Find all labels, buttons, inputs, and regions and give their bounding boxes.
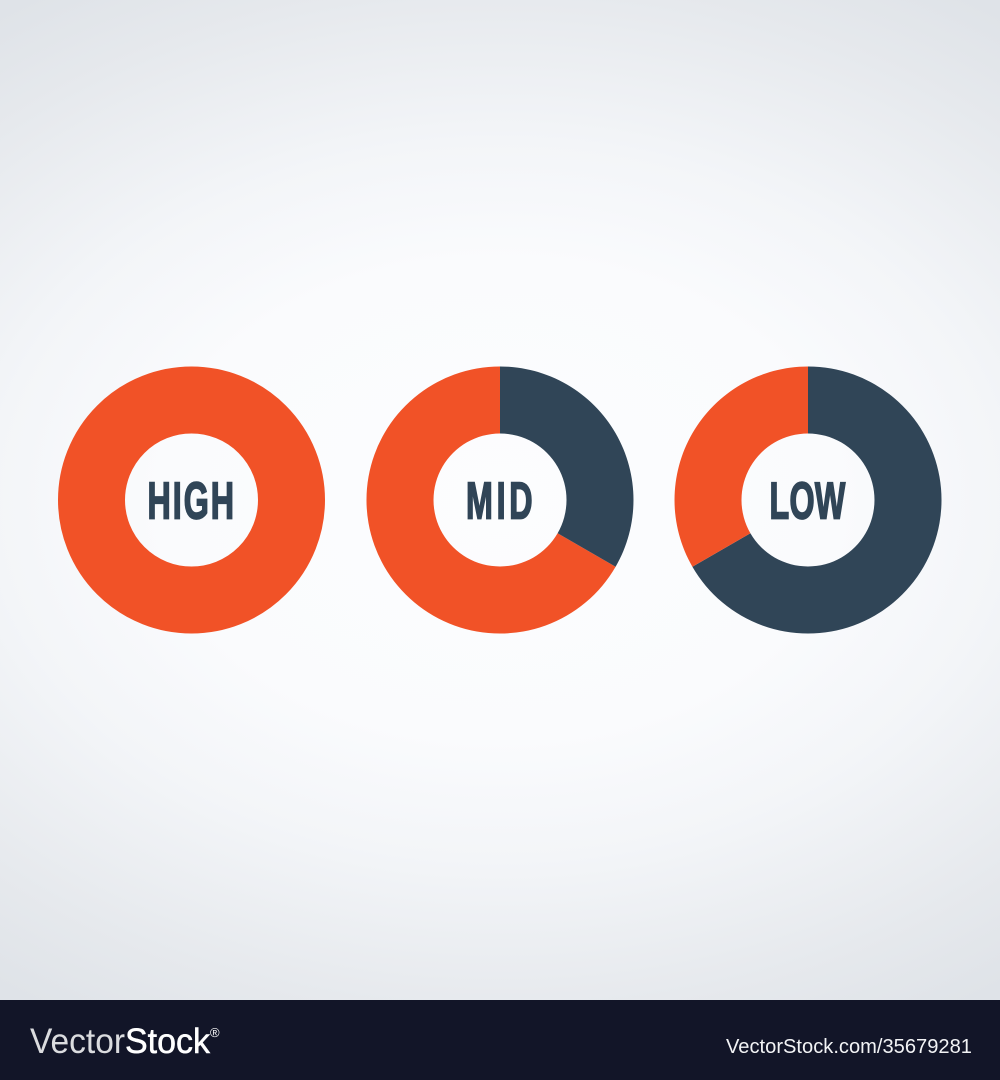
donut chart: low: [675, 366, 942, 634]
donut chart: mid: [366, 366, 633, 634]
label: high: HIGH: [148, 473, 236, 530]
footer logo: Vector: [30, 1022, 125, 1061]
donut chart: high: [92, 400, 292, 600]
footer logo: Stock: [125, 1022, 210, 1061]
label: mid: MID: [466, 473, 536, 530]
footer logo: [30, 1022, 220, 1061]
footer logo: ®: [210, 1025, 220, 1040]
footer image id: VectorStock.com/35679281: [726, 1036, 972, 1058]
footer bar: [0, 1000, 1000, 1080]
label: low: LOW: [770, 473, 846, 530]
